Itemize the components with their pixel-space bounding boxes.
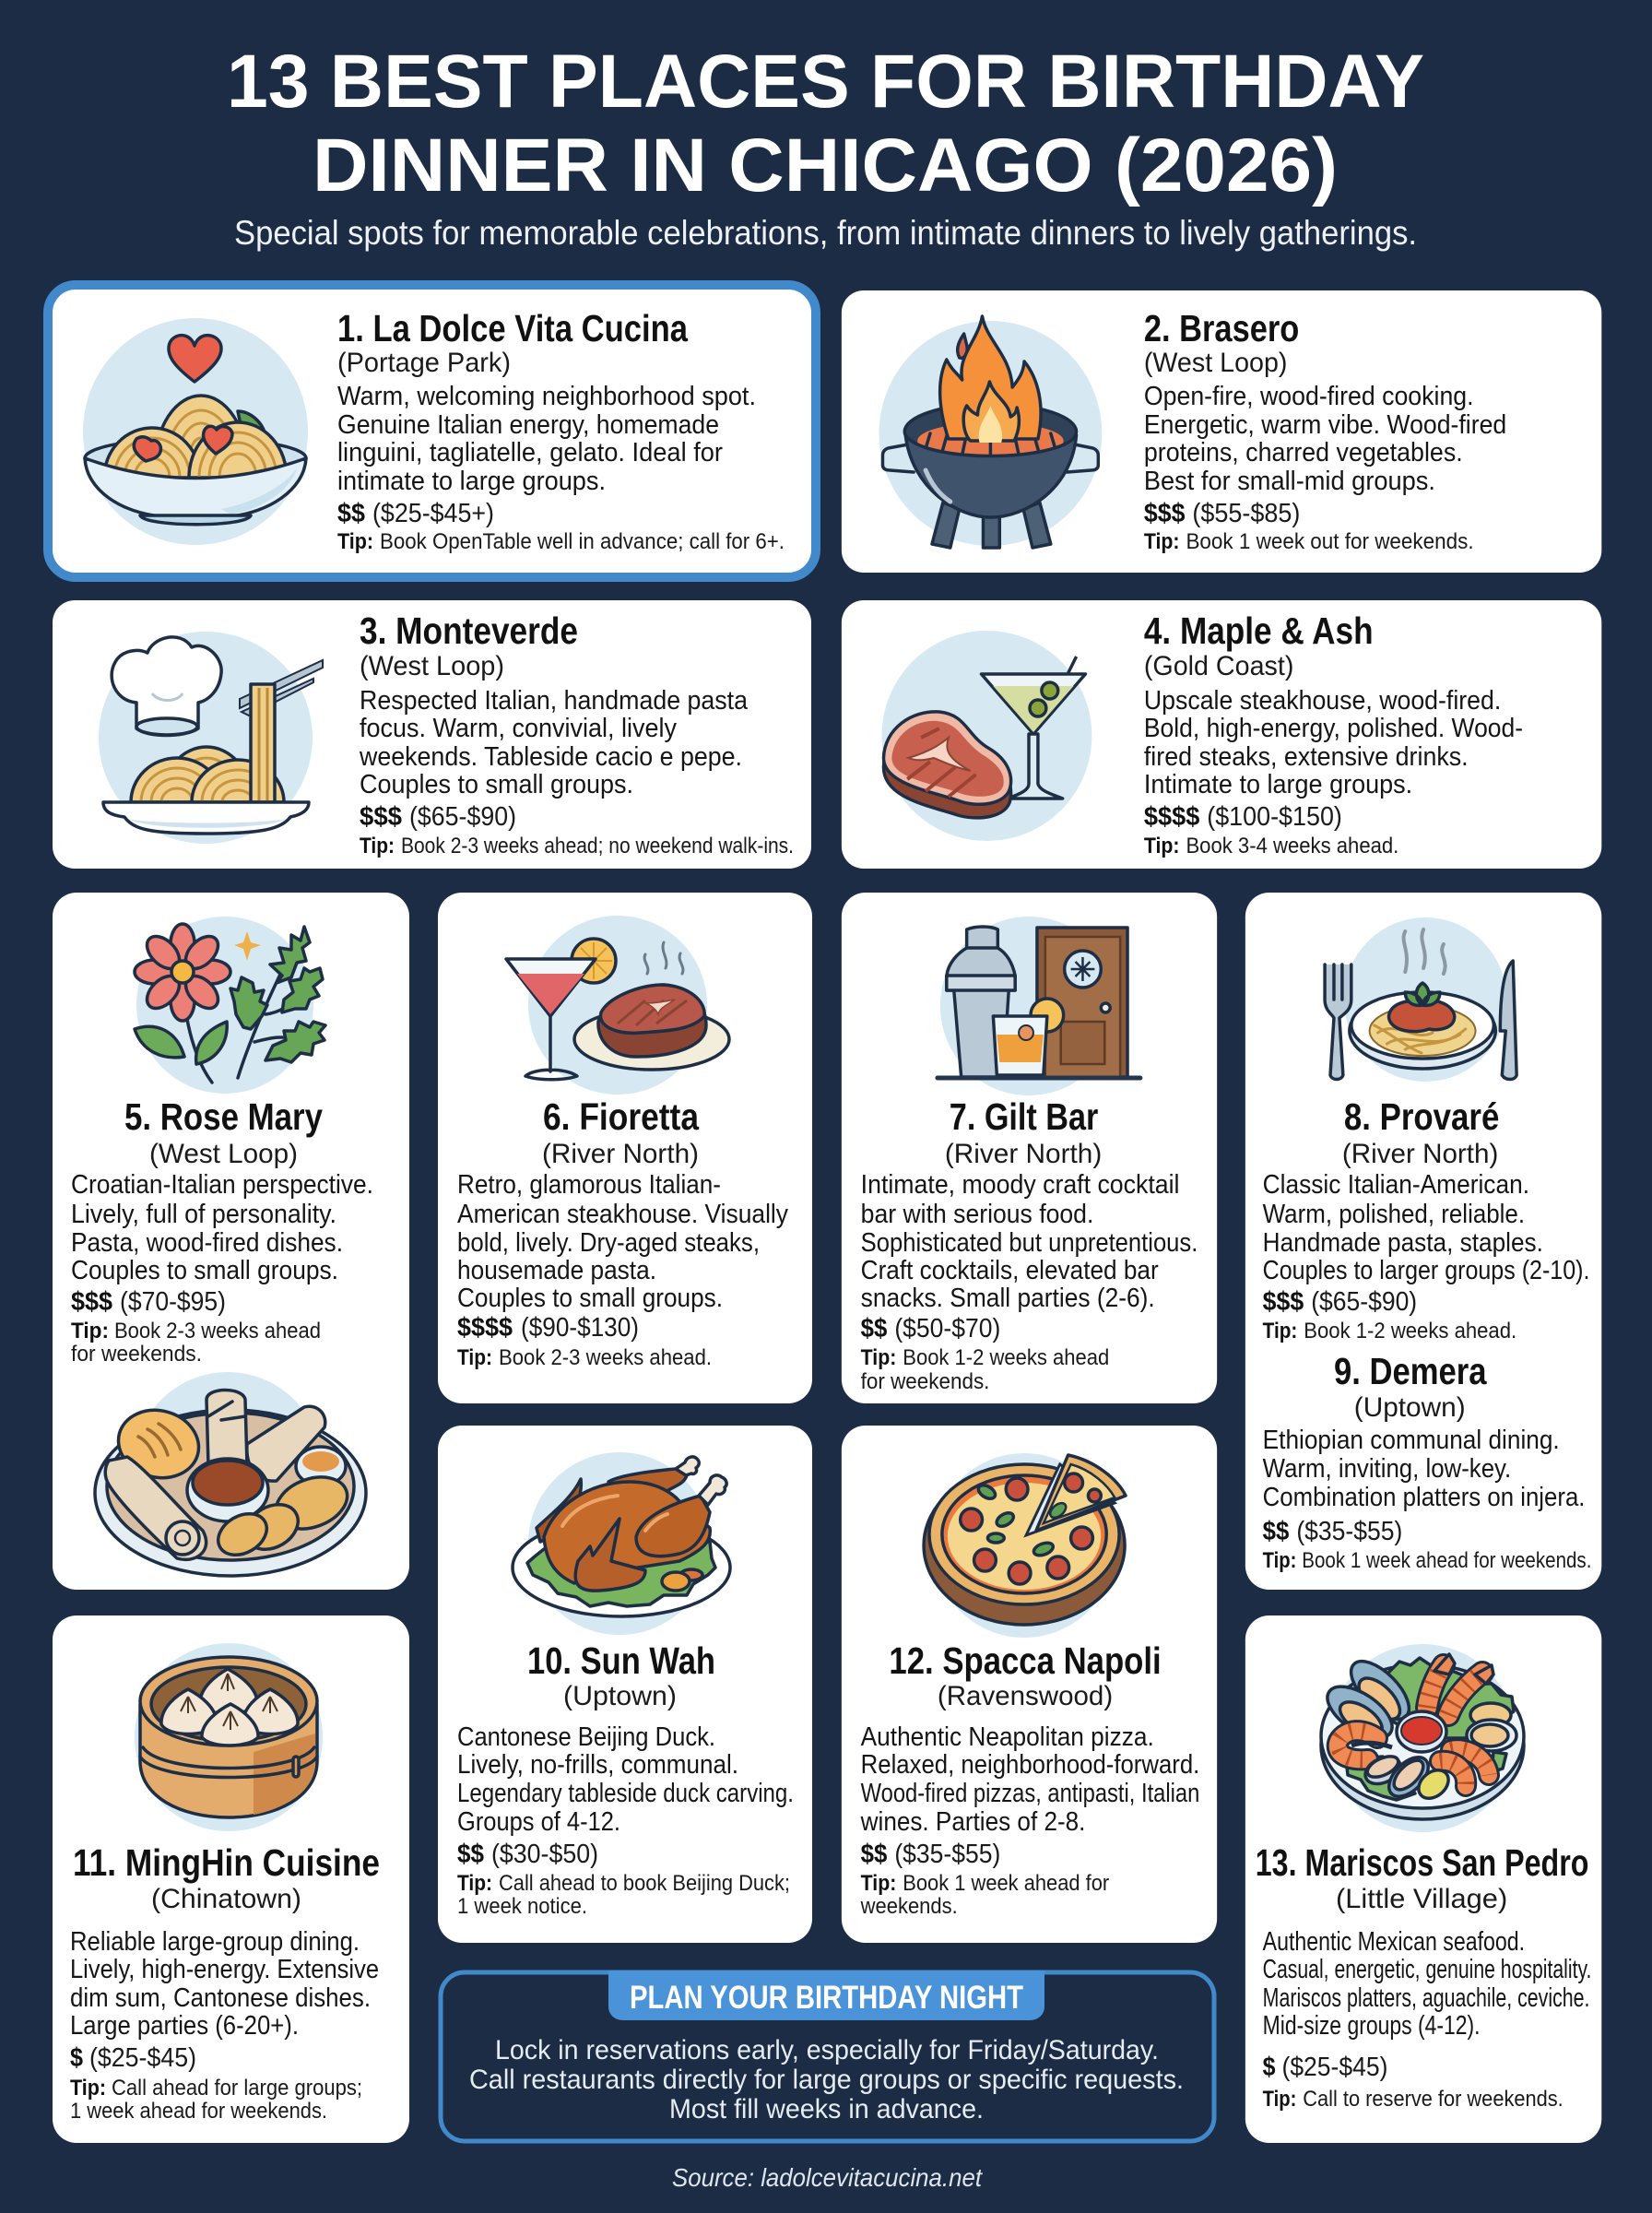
description: Demera: Ethiopian communal dining. bbox=[1263, 1426, 1560, 1455]
tip: Provaré: Tip: bbox=[1263, 1319, 1297, 1343]
card background bbox=[842, 1426, 1217, 1943]
panel: 10. Sun Wah bbox=[438, 1426, 812, 1943]
panel: 12. Spacca Napoli bbox=[842, 1426, 1217, 1943]
callout text: Most fill weeks in advance. bbox=[669, 2094, 984, 2124]
name: 3. Monteverde bbox=[360, 609, 578, 652]
tip: for weekends. bbox=[861, 1369, 989, 1394]
name: 1. La Dolce Vita Cucina bbox=[337, 307, 689, 349]
panel: 5. Rose Mary bbox=[53, 893, 409, 1590]
neighborhood: (Portage Park) bbox=[337, 348, 511, 378]
icon: roast duck bbox=[513, 1452, 730, 1635]
description: dim sum, Cantonese dishes. bbox=[70, 1983, 371, 2013]
tip: Call ahead for large groups; bbox=[112, 2076, 362, 2101]
panel: plan your birthday night callout bbox=[441, 1970, 1214, 2141]
tip: Tip: bbox=[71, 1319, 109, 1343]
icon: seafood platter bbox=[1319, 1644, 1524, 1832]
name: 6. Fioretta bbox=[543, 1095, 700, 1138]
name: 11. MingHin Cuisine bbox=[73, 1841, 380, 1884]
tip: Tip: bbox=[360, 834, 395, 858]
description: American steakhouse. Visually bbox=[457, 1200, 788, 1229]
description: linguini, tagliatelle, gelato. Ideal for bbox=[337, 438, 723, 467]
price: $$ bbox=[861, 1314, 887, 1343]
description bbox=[457, 1722, 794, 1837]
description: Lively, high-energy. Extensive bbox=[70, 1955, 379, 1984]
neighborhood: (Gold Coast) bbox=[1144, 651, 1293, 681]
neighborhood: (Little Village) bbox=[1336, 1884, 1507, 1914]
price: $$ bbox=[337, 499, 365, 528]
name: 12. Spacca Napoli bbox=[889, 1639, 1162, 1682]
price: ($55-$85) bbox=[1192, 499, 1300, 528]
callout frame bbox=[441, 1972, 1214, 2141]
tip: Tip: bbox=[1144, 529, 1180, 554]
neighborhood: (West Loop) bbox=[149, 1139, 298, 1169]
description: Intimate to large groups. bbox=[1144, 770, 1412, 799]
icon: plate of spaghetti with cutlery bbox=[1325, 917, 1516, 1082]
neighborhood: (Uptown) bbox=[563, 1681, 677, 1711]
tip bbox=[457, 1871, 790, 1919]
tip: Tip: bbox=[861, 1871, 896, 1896]
price: ($25-$45) bbox=[1281, 2053, 1387, 2082]
description: Relaxed, neighborhood-forward. bbox=[861, 1750, 1199, 1780]
tip: Tip: bbox=[1263, 2087, 1296, 2112]
tip: Call to reserve for weekends. bbox=[1303, 2087, 1564, 2112]
panel: 7. Gilt Bar bbox=[842, 893, 1217, 1403]
tip: Book 2-3 weeks ahead; no weekend walk-ins. bbox=[401, 834, 794, 858]
tip bbox=[70, 2076, 362, 2124]
card background bbox=[53, 1615, 409, 2143]
price bbox=[71, 1287, 226, 1317]
price bbox=[1144, 802, 1342, 832]
description: weekends. Tableside cacio e pepe. bbox=[359, 742, 742, 772]
description: Mid-size groups (4-12). bbox=[1263, 2011, 1481, 2041]
description: Wood-fired pizzas, antipasti, Italian bbox=[861, 1779, 1199, 1808]
description: Authentic Mexican seafood. bbox=[1263, 1927, 1525, 1957]
price: Provaré: ($65-$90) bbox=[1311, 1287, 1417, 1317]
icon: shaker and door bbox=[938, 917, 1140, 1095]
card background bbox=[438, 1426, 812, 1943]
card background bbox=[842, 600, 1601, 869]
tip: Book 2-3 weeks ahead bbox=[114, 1319, 321, 1343]
card background bbox=[842, 290, 1601, 573]
description: Legendary tableside duck carving. bbox=[457, 1779, 794, 1808]
description: bar with serious food. bbox=[861, 1200, 1093, 1229]
description: Provaré bbox=[1263, 1170, 1589, 1285]
name: 10. Sun Wah bbox=[527, 1639, 715, 1682]
description: Energetic, warm vibe. Wood-fired bbox=[1144, 410, 1506, 440]
description: proteins, charred vegetables. bbox=[1144, 438, 1463, 467]
card background bbox=[1245, 893, 1601, 1590]
price bbox=[1144, 499, 1300, 528]
description: housemade pasta. bbox=[457, 1256, 656, 1285]
description: Provaré: Classic Italian-American. bbox=[1263, 1170, 1529, 1200]
card background highlighted bbox=[48, 285, 816, 577]
price: Provaré: $$$ bbox=[1263, 1287, 1304, 1317]
description bbox=[457, 1170, 788, 1313]
panel: 11. MingHin Cuisine bbox=[53, 1615, 409, 2143]
card background bbox=[53, 893, 409, 1590]
description: Couples to small groups. bbox=[457, 1284, 723, 1313]
description: Demera: Warm, inviting, low-key. bbox=[1263, 1454, 1511, 1484]
callout text: Lock in reservations early, especially for Friday/Saturday. bbox=[495, 2035, 1159, 2065]
panel: 1. La Dolce Vita Cucina bbox=[48, 285, 816, 577]
tip bbox=[860, 1871, 1109, 1919]
description bbox=[359, 686, 749, 799]
price: ($25-$45) bbox=[89, 2043, 196, 2073]
description: Demera bbox=[1263, 1426, 1585, 1512]
tip: for weekends. bbox=[71, 1342, 202, 1367]
description: Open-fire, wood-fired cooking. bbox=[1144, 382, 1474, 411]
neighborhood: (River North) bbox=[542, 1139, 699, 1169]
description: focus. Warm, convivial, lively bbox=[360, 714, 677, 743]
subtitle: Special spots for memorable celebrations, from intimate dinners to lively gatherings. bbox=[234, 214, 1417, 252]
price bbox=[360, 802, 516, 832]
title: 13 BEST PLACES FOR BIRTHDAY bbox=[227, 40, 1424, 124]
description: Lively, no-frills, communal. bbox=[457, 1750, 738, 1780]
description: Upscale steakhouse, wood-fired. bbox=[1144, 686, 1501, 716]
tip: Call ahead to book Beijing Duck; bbox=[499, 1871, 790, 1896]
description: Warm, welcoming neighborhood spot. bbox=[337, 382, 756, 411]
price bbox=[457, 1313, 639, 1343]
description: Best for small-mid groups. bbox=[1144, 467, 1435, 496]
description: Reliable large-group dining. bbox=[70, 1927, 360, 1957]
icon: chef hat and pasta bbox=[99, 632, 323, 844]
tip: Tip: bbox=[861, 1345, 896, 1370]
price: $$ bbox=[457, 1840, 484, 1869]
tip: Book OpenTable well in advance; call for 6+. bbox=[380, 529, 785, 554]
description bbox=[337, 382, 756, 496]
icon: flower and herbs bbox=[135, 917, 325, 1094]
price: $$$ bbox=[71, 1287, 112, 1317]
tip: Book 1-2 weeks ahead bbox=[903, 1345, 1109, 1370]
tip: Book 1 week ahead for bbox=[903, 1871, 1109, 1896]
card background bbox=[438, 893, 812, 1403]
price: ($100-$150) bbox=[1207, 802, 1342, 832]
price: $$$ bbox=[1144, 499, 1185, 528]
neighborhood: (River North) bbox=[945, 1139, 1102, 1169]
description: Genuine Italian energy, homemade bbox=[337, 410, 719, 440]
price: Provaré bbox=[1263, 1287, 1417, 1317]
tip: Book 1 week out for weekends. bbox=[1186, 529, 1474, 554]
description: Large parties (6-20+). bbox=[70, 2011, 299, 2041]
icon: pizza with slice bbox=[924, 1453, 1126, 1638]
panel: 13. Mariscos San Pedro bbox=[1245, 1615, 1601, 2143]
description: Bold, high-energy, polished. Wood- bbox=[1144, 714, 1523, 743]
name: 4. Maple & Ash bbox=[1144, 609, 1374, 652]
description: Groups of 4-12. bbox=[457, 1807, 620, 1837]
icon: pasta bowl with heart bbox=[83, 318, 308, 545]
neighborhood: (Chinatown) bbox=[151, 1884, 301, 1914]
callout text: Call restaurants directly for large groups or specific requests. bbox=[469, 2065, 1184, 2095]
tip: Provaré: Book 1-2 weeks ahead. bbox=[1304, 1319, 1516, 1343]
description: Retro, glamorous Italian- bbox=[457, 1170, 721, 1200]
description: Intimate, moody craft cocktail bbox=[861, 1170, 1180, 1200]
price: $$ bbox=[861, 1840, 887, 1869]
callout heading pill bbox=[608, 1970, 1044, 2020]
price: ($90-$130) bbox=[521, 1313, 639, 1343]
icon: cocktail and steak bbox=[506, 916, 729, 1095]
panel: 3. Monteverde bbox=[53, 600, 811, 869]
description: intimate to large groups. bbox=[337, 467, 606, 496]
tip: Demera: Tip: bbox=[1263, 1548, 1296, 1573]
description: bold, lively. Dry-aged steaks, bbox=[457, 1228, 760, 1258]
neighborhood: (West Loop) bbox=[360, 651, 504, 681]
neighborhood: Demera: (Uptown) bbox=[1354, 1392, 1466, 1423]
panel: 6. Fioretta bbox=[438, 893, 812, 1403]
price: $$$$ bbox=[457, 1313, 513, 1343]
panel: 8. Provaré and 9. Demera bbox=[1245, 893, 1601, 1590]
icon: dim sum steamer bbox=[135, 1643, 323, 1831]
tip: Tip: bbox=[457, 1871, 492, 1896]
title: DINNER IN CHICAGO (2026) bbox=[313, 124, 1338, 207]
tip: Tip: bbox=[457, 1345, 492, 1370]
tip: Demera: Book 1 week ahead for weekends. bbox=[1302, 1548, 1591, 1573]
description: Provaré: Handmade pasta, staples. bbox=[1263, 1228, 1543, 1258]
description bbox=[1144, 686, 1523, 799]
description bbox=[1144, 382, 1506, 496]
description: Craft cocktails, elevated bar bbox=[861, 1256, 1159, 1285]
name: Provaré: 8. Provaré bbox=[1344, 1095, 1499, 1138]
callout heading: PLAN YOUR BIRTHDAY NIGHT bbox=[630, 1980, 1023, 2016]
price: $$$ bbox=[360, 802, 402, 832]
card background bbox=[842, 893, 1217, 1403]
name: 5. Rose Mary bbox=[124, 1095, 323, 1138]
description: fired steaks, extensive drinks. bbox=[1144, 742, 1469, 772]
price: ($25-$45+) bbox=[372, 499, 494, 528]
description bbox=[860, 1722, 1199, 1837]
card background bbox=[53, 600, 811, 869]
description: Respected Italian, handmade pasta bbox=[360, 686, 749, 716]
price: ($30-$50) bbox=[491, 1840, 598, 1869]
description: Lively, full of personality. bbox=[71, 1200, 336, 1229]
tip: 1 week notice. bbox=[457, 1894, 587, 1919]
name: 2. Brasero bbox=[1144, 307, 1299, 349]
description: Authentic Neapolitan pizza. bbox=[861, 1722, 1154, 1752]
card background bbox=[1245, 1615, 1601, 2143]
source line: Source: ladolcevitacucina.net bbox=[672, 2163, 983, 2192]
description bbox=[1263, 1927, 1591, 2041]
description: Couples to small groups. bbox=[71, 1256, 338, 1285]
price: ($35-$55) bbox=[894, 1840, 1000, 1869]
panel: 4. Maple & Ash bbox=[842, 600, 1601, 869]
price: ($65-$90) bbox=[409, 802, 516, 832]
price: ($50-$70) bbox=[894, 1314, 1000, 1343]
description bbox=[71, 1170, 373, 1285]
description: wines. Parties of 2-8. bbox=[860, 1807, 1085, 1837]
description: Provaré: Couples to larger groups (2-10). bbox=[1263, 1256, 1589, 1285]
price: $$$$ bbox=[1144, 802, 1199, 832]
tip: Book 2-3 weeks ahead. bbox=[499, 1345, 712, 1370]
tip: weekends. bbox=[860, 1894, 958, 1919]
neighborhood: (Ravenswood) bbox=[938, 1681, 1113, 1711]
description: Croatian-Italian perspective. bbox=[71, 1170, 373, 1200]
description: Couples to small groups. bbox=[360, 770, 633, 799]
price: $ bbox=[1263, 2053, 1276, 2082]
tip bbox=[71, 1319, 321, 1367]
icon: fire grill bbox=[879, 316, 1102, 548]
tip: Tip: bbox=[1144, 834, 1180, 858]
icon: injera platter bbox=[95, 1372, 366, 1576]
title bbox=[227, 40, 1424, 207]
price: Demera: $$ bbox=[1263, 1517, 1289, 1546]
callout text bbox=[469, 2035, 1184, 2124]
name: 7. Gilt Bar bbox=[950, 1095, 1098, 1138]
description: Demera: Combination platters on injera. bbox=[1263, 1483, 1585, 1512]
description: Sophisticated but unpretentious. bbox=[861, 1228, 1198, 1258]
description: Cantonese Beijing Duck. bbox=[457, 1722, 715, 1752]
tip: Tip: bbox=[337, 529, 373, 554]
tip: Book 3-4 weeks ahead. bbox=[1186, 834, 1398, 858]
panel: 2. Brasero bbox=[842, 290, 1601, 573]
neighborhood: (West Loop) bbox=[1144, 348, 1287, 378]
tip: 1 week ahead for weekends. bbox=[70, 2099, 327, 2124]
price: $ bbox=[70, 2043, 83, 2073]
tip bbox=[861, 1345, 1109, 1394]
tip: Tip: bbox=[70, 2076, 106, 2101]
description: Provaré: Warm, polished, reliable. bbox=[1263, 1200, 1525, 1229]
description bbox=[861, 1170, 1198, 1313]
icon: steak and martini bbox=[881, 631, 1092, 841]
price: Demera: ($35-$55) bbox=[1296, 1517, 1402, 1546]
neighborhood: Provaré: (River North) bbox=[1342, 1139, 1498, 1169]
description: snacks. Small parties (2-6). bbox=[861, 1284, 1155, 1313]
description bbox=[70, 1927, 379, 2041]
description: Pasta, wood-fired dishes. bbox=[71, 1228, 343, 1258]
price: ($70-$95) bbox=[120, 1287, 226, 1317]
name: Demera: 9. Demera bbox=[1334, 1350, 1487, 1392]
